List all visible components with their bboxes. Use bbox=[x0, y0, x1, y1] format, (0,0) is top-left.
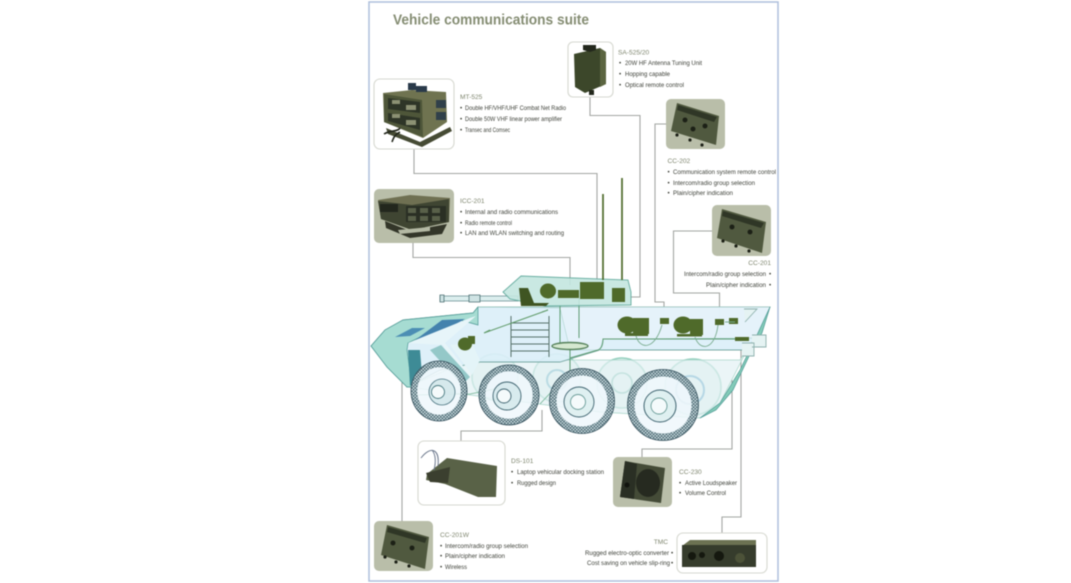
SA-525/20 text: 20W HF Antenna Tuning Unit bbox=[625, 60, 702, 67]
ICC-201 text: Internal and radio communications bbox=[465, 209, 558, 216]
panel: MT-525 bbox=[374, 79, 566, 149]
SA-525/20 text: • bbox=[619, 60, 621, 67]
MT-525 text: MT-525 bbox=[460, 94, 483, 101]
CC-201 text: • bbox=[769, 271, 771, 278]
wheel 2 bbox=[479, 365, 539, 425]
CC-201W text: Plain/cipher indication bbox=[445, 553, 506, 560]
DS-101 text: Laptop vehicular docking station bbox=[517, 469, 605, 476]
CC-201 text: Intercom/radio group selection bbox=[684, 271, 767, 278]
title: Vehicle communications suite bbox=[393, 12, 589, 28]
wheel 4 bbox=[628, 370, 698, 440]
CC-201W text: • bbox=[440, 553, 442, 560]
ICC-201 image box bbox=[374, 189, 454, 243]
CC-201W text: • bbox=[440, 543, 442, 550]
TMC text: • bbox=[671, 560, 673, 567]
SA-525/20 text bbox=[618, 50, 702, 89]
MT-525 text: Double 50W VHF linear power amplifier bbox=[465, 116, 562, 123]
crew sets bbox=[618, 316, 636, 334]
MT-525 text: • bbox=[460, 127, 462, 134]
DS-101 text: • bbox=[511, 469, 513, 476]
leader lines bbox=[402, 97, 741, 533]
CC-202 text: • bbox=[668, 190, 670, 197]
panel: CC-201 bbox=[684, 205, 771, 289]
MT-525 text: • bbox=[460, 105, 462, 112]
icon: electro-optic converter bbox=[682, 540, 756, 567]
CC-230 text: • bbox=[679, 480, 681, 487]
DS-101 text: • bbox=[511, 480, 513, 487]
CC-201 text bbox=[684, 260, 771, 289]
icon: wireless control unit bbox=[381, 525, 429, 569]
antennas bbox=[603, 178, 622, 280]
CC-230 text bbox=[679, 469, 737, 497]
TMC text: TMC bbox=[654, 539, 668, 546]
muzzle bbox=[440, 295, 480, 302]
windscreen panels bbox=[395, 316, 480, 386]
CC-201W text: Wireless bbox=[445, 564, 467, 571]
turret equipment bbox=[458, 282, 749, 350]
wiring bbox=[636, 322, 735, 346]
ICC-201 text: Radio remote control bbox=[465, 220, 512, 227]
SA-525/20 text: SA-525/20 bbox=[618, 50, 649, 56]
DS-101 image box bbox=[418, 441, 505, 505]
CC-202 text: CC-202 bbox=[668, 158, 691, 165]
CC-230 image box bbox=[613, 457, 672, 507]
hull front plating bbox=[371, 307, 478, 387]
TMC text: • bbox=[671, 550, 673, 557]
panel: SA-525/20 bbox=[568, 42, 702, 97]
panel: ICC-201 bbox=[374, 189, 565, 243]
MT-525 text: Transec and Comsec bbox=[465, 127, 510, 134]
CC-202 text: Communication system remote control bbox=[673, 169, 776, 176]
ICC-201 text: • bbox=[460, 209, 462, 216]
hull bbox=[371, 307, 770, 387]
DS-101 text: DS-101 bbox=[511, 458, 534, 465]
SA-525/20 text: • bbox=[619, 82, 621, 89]
panel: TMC bbox=[585, 533, 767, 573]
slanted strut bbox=[484, 310, 548, 333]
icon: loudspeaker bbox=[620, 461, 665, 503]
pipes bbox=[560, 298, 743, 372]
turret bbox=[503, 276, 631, 306]
TMC text bbox=[585, 539, 673, 567]
CC-201 image box bbox=[712, 205, 771, 256]
TMC text: Rugged electro-optic converter bbox=[585, 550, 669, 557]
CC-202 text: • bbox=[668, 180, 670, 187]
icon: intercom unit bbox=[378, 195, 450, 238]
MT-525 text: Double HF/VHF/UHF Combat Net Radio bbox=[465, 105, 566, 112]
panel: CC-201W bbox=[374, 521, 529, 571]
CC-201W text: CC-201W bbox=[440, 532, 470, 539]
panel: DS-101 bbox=[418, 441, 605, 505]
CC-230 text: CC-230 bbox=[679, 469, 702, 476]
CC-202 text bbox=[668, 158, 776, 197]
wheel 1 bbox=[411, 361, 467, 421]
vehicle bbox=[371, 178, 770, 440]
MT-525 text: • bbox=[460, 116, 462, 123]
TMC image box bbox=[677, 533, 767, 573]
SA-525/20 text: Hopping capable bbox=[625, 71, 671, 78]
CC-201W text: • bbox=[440, 564, 442, 571]
ICC-201 text: • bbox=[460, 230, 462, 237]
DS-101 text bbox=[511, 458, 605, 487]
icon: combat net radio bbox=[383, 83, 452, 147]
CC-202 text: • bbox=[668, 169, 670, 176]
turntable bbox=[552, 342, 588, 350]
CC-201W text bbox=[440, 532, 529, 571]
CC-230 text: • bbox=[679, 490, 681, 497]
front set bbox=[458, 338, 472, 350]
upper hull bbox=[478, 307, 770, 350]
CC-202 text: Intercom/radio group selection bbox=[673, 180, 756, 187]
wheel 3 bbox=[550, 368, 614, 434]
CC-201W image box bbox=[374, 521, 433, 571]
SA-525/20 image box bbox=[568, 42, 613, 97]
CC-202 image box bbox=[666, 99, 725, 149]
ladder bbox=[511, 316, 549, 357]
icon: CC-201 control unit bbox=[717, 209, 766, 253]
icon: docking station bbox=[421, 450, 497, 497]
DS-101 text: Rugged design bbox=[517, 480, 557, 487]
ICC-201 text bbox=[460, 198, 565, 237]
panel: CC-202 bbox=[666, 99, 776, 197]
rear fitting bbox=[742, 309, 766, 356]
wiring under hull bbox=[412, 372, 570, 404]
CC-201 text: • bbox=[769, 282, 771, 289]
MT-525 text bbox=[460, 94, 566, 134]
page frame bbox=[369, 2, 778, 581]
ICC-201 text: ICC-201 bbox=[460, 198, 485, 205]
rear door bbox=[700, 307, 770, 418]
ICC-201 text: • bbox=[460, 220, 462, 227]
CC-201W text: Intercom/radio group selection bbox=[445, 543, 529, 550]
icon: CC-202 control unit bbox=[671, 103, 719, 147]
rear wheels bbox=[472, 354, 721, 415]
lower hull bbox=[407, 350, 747, 418]
TMC text: Cost saving on vehicle slip-ring bbox=[587, 560, 671, 567]
MT-525 image box bbox=[374, 79, 454, 149]
CC-201 text: CC-201 bbox=[748, 260, 771, 267]
ICC-201 text: LAN and WLAN switching and routing bbox=[465, 230, 565, 237]
SA-525/20 text: • bbox=[619, 71, 621, 78]
CC-230 text: Active Loudspeaker bbox=[685, 480, 737, 487]
CC-202 text: Plain/cipher indication bbox=[673, 190, 734, 197]
SA-525/20 text: Optical remote control bbox=[625, 82, 684, 89]
panel: CC-230 bbox=[613, 457, 737, 507]
icon: antenna tuning unit bbox=[574, 45, 606, 95]
CC-230 text: Volume Control bbox=[685, 490, 726, 497]
CC-201 text: Plain/cipher indication bbox=[706, 282, 767, 289]
cannon bbox=[440, 296, 518, 301]
